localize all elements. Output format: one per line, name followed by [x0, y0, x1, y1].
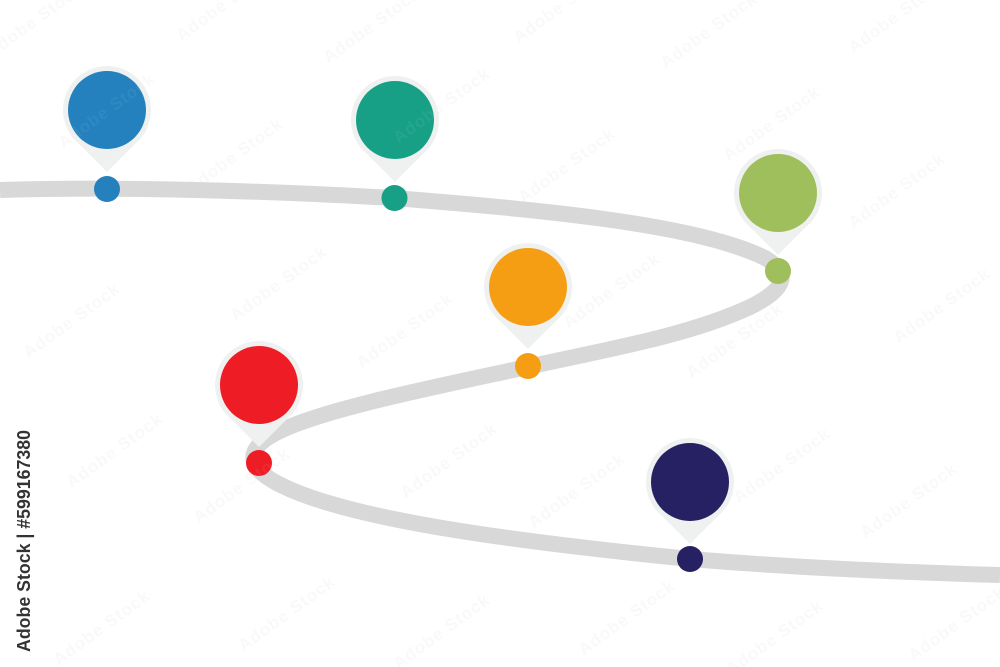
watermark pattern: Adobe Stock: [845, 149, 949, 232]
watermark over shapes: Adobe Stock: [525, 449, 629, 532]
pin 1: blue: [63, 66, 151, 202]
watermark pattern: Adobe Stock: [55, 69, 159, 152]
watermark pattern: Adobe Stock: [63, 409, 167, 492]
watermark pattern: Adobe Stock: [560, 249, 664, 332]
watermark pattern: Adobe Stock: [683, 299, 787, 382]
watermark pattern: Adobe Stock: [227, 242, 331, 325]
watermark pattern: Adobe Stock: [525, 449, 629, 532]
watermark pattern: Adobe Stock: [190, 444, 294, 527]
watermark over shapes: Adobe Stock: [55, 69, 159, 152]
pin 2: teal: [351, 76, 439, 211]
stock id label: Adobe Stock | #599167380: [13, 430, 34, 652]
watermark pattern: Adobe Stock: [397, 419, 501, 502]
watermark pattern: Adobe Stock: [575, 576, 679, 659]
watermark over shapes: Adobe Stock: [227, 242, 331, 325]
watermark over shapes: [55, 64, 824, 532]
pin 3: green: [734, 149, 822, 284]
watermark over shapes: Adobe Stock: [190, 444, 294, 527]
watermark pattern: Adobe Stock: [515, 124, 619, 207]
watermark pattern: Adobe Stock: [353, 289, 457, 372]
watermark pattern: Adobe Stock: [235, 572, 339, 655]
watermark pattern: Adobe Stock: [730, 424, 834, 507]
watermark over shapes: Adobe Stock: [560, 249, 664, 332]
watermark pattern: Adobe Stock: [50, 586, 154, 667]
pin 4: orange: [484, 243, 572, 379]
watermark pattern: Adobe Stock: [20, 279, 124, 362]
watermark pattern: Adobe Stock: [890, 264, 994, 347]
watermark pattern: Adobe Stock: [720, 82, 824, 165]
watermark pattern: Adobe Stock: [183, 114, 287, 197]
pin 5: red: [215, 341, 303, 476]
watermark over shapes: Adobe Stock: [720, 82, 824, 165]
winding road: [0, 189, 1000, 575]
watermark pattern: Adobe Stock: [390, 64, 494, 147]
watermark pattern: Adobe Stock: [857, 459, 961, 542]
watermark over shapes: Adobe Stock: [390, 64, 494, 147]
watermark over shapes: Adobe Stock: [515, 124, 619, 207]
pin 6: navy: [646, 438, 734, 572]
